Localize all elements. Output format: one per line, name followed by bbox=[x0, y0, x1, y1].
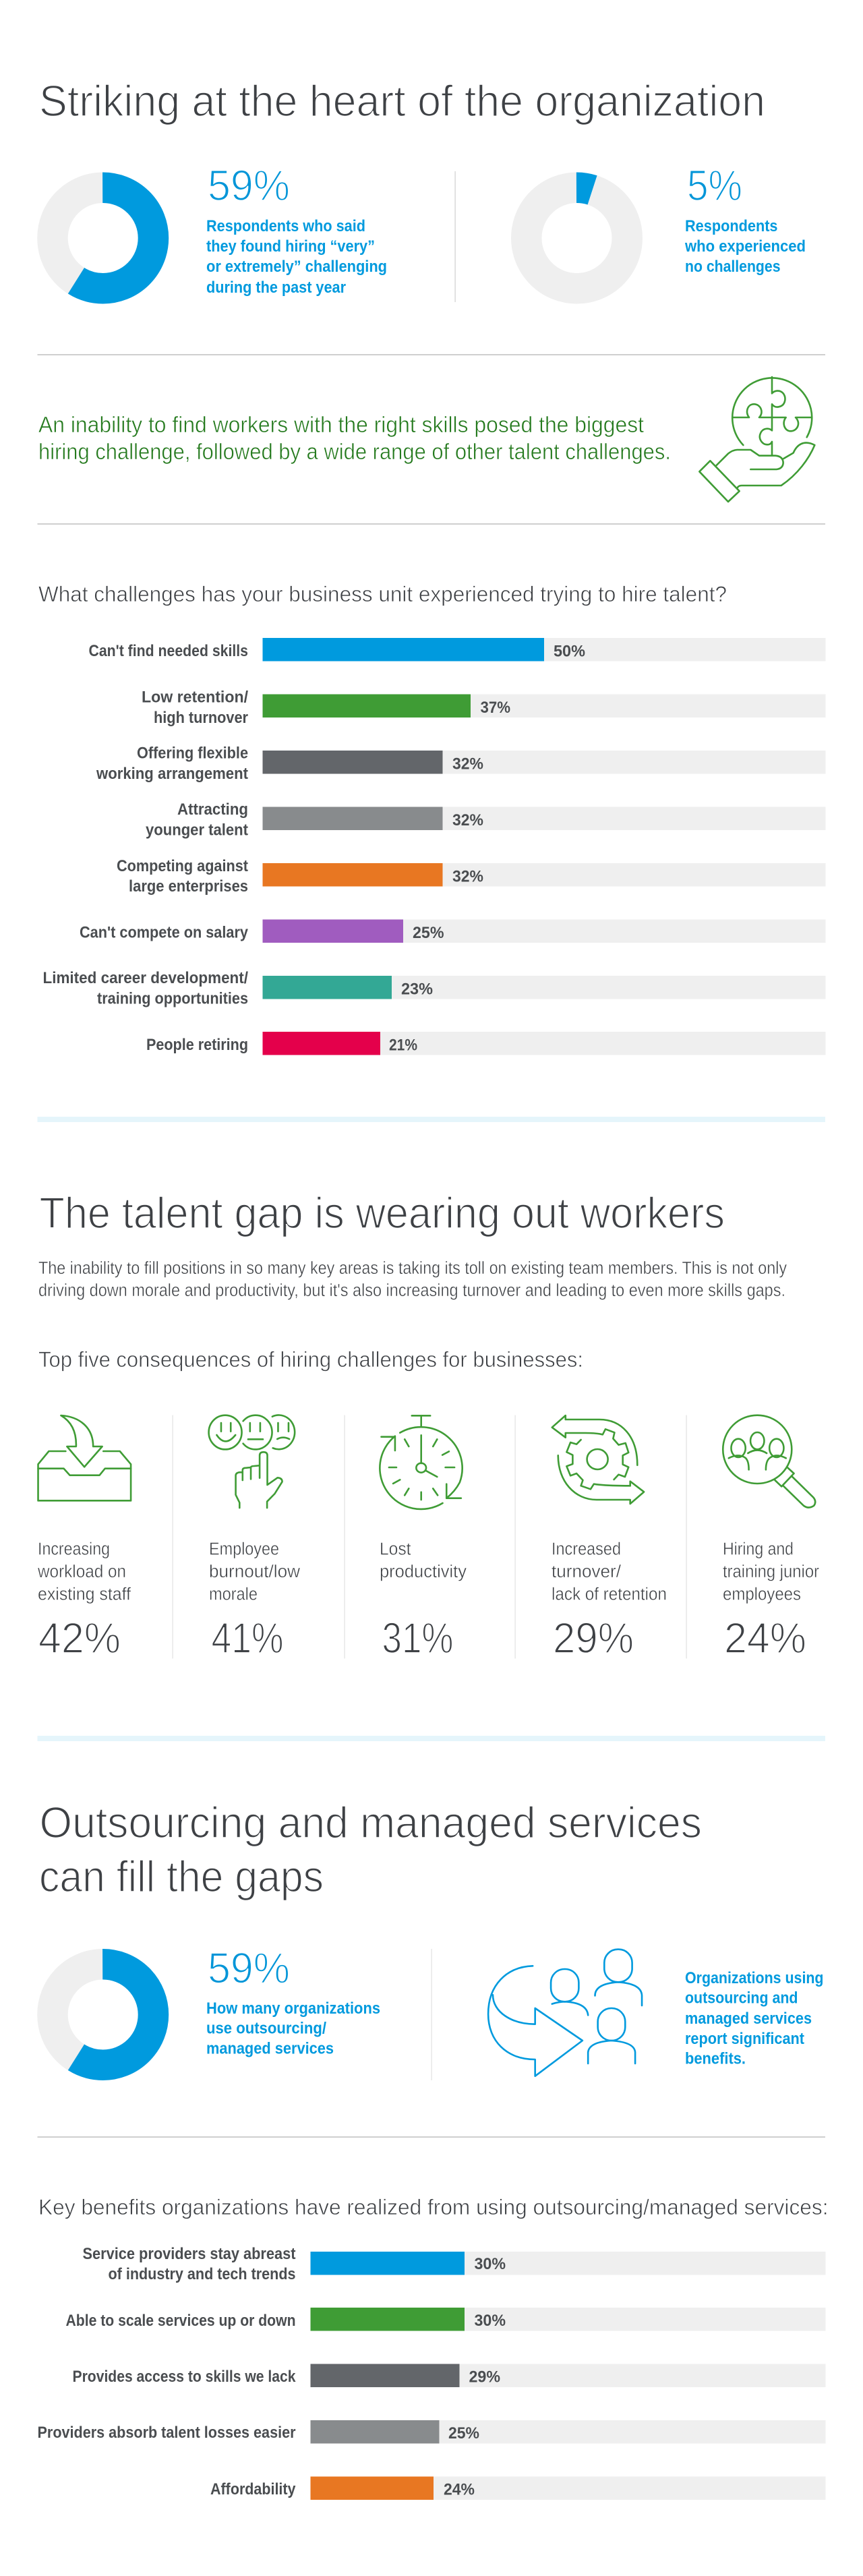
bar: absorb talent losses: Providers absorb talent losses easier bbox=[38, 2424, 295, 2442]
description 59% outsourcing: use outsourcing/ bbox=[206, 2019, 326, 2038]
donut chart 5% bbox=[527, 187, 627, 289]
stat: 41%: 41% bbox=[212, 1614, 283, 1662]
icon: faces and pointing hand bbox=[209, 1415, 295, 1508]
icon: magnifier over people bbox=[723, 1415, 815, 1507]
description: benefits: benefits. bbox=[685, 2050, 746, 2068]
label: increasing workload bbox=[37, 1540, 131, 1604]
label: increased turnover: turnover/ bbox=[552, 1562, 622, 1581]
description 59%: or extremely” challenging bbox=[206, 258, 387, 276]
bar: low retention: 37% bbox=[480, 699, 510, 717]
bar: limited career development: 23% bbox=[401, 980, 433, 998]
column: hiring junior employees 24% bbox=[723, 1415, 819, 1662]
stat: 42%: 42% bbox=[38, 1614, 121, 1662]
bar: attracting younger talent: younger talent bbox=[146, 821, 248, 839]
bar: absorb talent losses: 25% bbox=[448, 2424, 479, 2442]
bar: can't compete on salary bbox=[80, 920, 825, 943]
label: increasing workload: existing staff bbox=[38, 1585, 131, 1604]
bar: competing against large enterprises bbox=[117, 857, 825, 896]
bar: flexible working arrangement: working arrangement bbox=[96, 765, 248, 783]
bar: people retiring bbox=[146, 1032, 825, 1055]
stat: 24%: 24% bbox=[724, 1614, 806, 1662]
label: employee burnout bbox=[209, 1540, 301, 1604]
bar: people retiring: People retiring bbox=[146, 1036, 248, 1054]
heading: challenges question: What challenges has your business unit experienced trying to hire talent? bbox=[38, 582, 727, 606]
bar: scale services: Able to scale services up or down bbox=[66, 2312, 295, 2330]
description: benefits: report significant bbox=[685, 2030, 804, 2048]
label: hiring junior: training junior bbox=[723, 1562, 819, 1581]
bar: flexible working arrangement: Offering flexible bbox=[137, 744, 248, 763]
bar: scale services: 30% bbox=[475, 2312, 506, 2330]
bar: limited career development: Limited career development/ bbox=[43, 969, 248, 987]
bar: low retention: high turnover bbox=[154, 709, 248, 727]
description 59% bbox=[206, 217, 387, 297]
stat 59% outsourcing: 59% bbox=[208, 1943, 290, 1992]
label: increased turnover: lack of retention bbox=[552, 1585, 667, 1604]
bar: access to skills: 29% bbox=[469, 2368, 500, 2386]
bar: competing against large enterprises: large enterprises bbox=[129, 877, 248, 896]
description 59% outsourcing: managed services bbox=[206, 2039, 334, 2058]
description: benefits bbox=[685, 1969, 824, 2068]
description 59%: they found hiring “very” bbox=[206, 237, 375, 256]
description 59% outsourcing: How many organizations bbox=[206, 1999, 380, 2018]
paragraph: talent gap intro: The inability to fill positions in so many key areas is taking its toll on existing team members. This is not only bbox=[38, 1259, 787, 1278]
icon: hand holding puzzle bbox=[699, 377, 814, 502]
bar: attracting younger talent: Attracting bbox=[177, 800, 248, 819]
stat: 29%: 29% bbox=[553, 1614, 634, 1662]
heading: outsourcing and managed services: Outsourcing and managed services bbox=[39, 1798, 702, 1847]
description 59% outsourcing bbox=[206, 1999, 380, 2058]
panel: significant benefits bbox=[488, 1950, 824, 2076]
description: benefits: outsourcing and bbox=[685, 1989, 798, 2007]
bar: attracting younger talent bbox=[146, 800, 825, 839]
bar: stay abreast: of industry and tech trends bbox=[108, 2265, 295, 2283]
label: employee burnout: burnout/low bbox=[209, 1562, 301, 1581]
bar chart: key benefits bbox=[38, 2245, 825, 2500]
callout: inability to find workers bbox=[38, 412, 671, 464]
panel: 59% organizations bbox=[53, 1943, 380, 2065]
bar: affordability bbox=[210, 2476, 825, 2500]
column: increased turnover 29% bbox=[552, 1415, 667, 1662]
bar: affordability: Affordability bbox=[210, 2480, 296, 2498]
label: increased turnover: Increased bbox=[552, 1540, 621, 1559]
donut chart 59% outsourcing bbox=[53, 1964, 153, 2065]
stat: 31%: 31% bbox=[382, 1614, 453, 1662]
description 5%: Respondents bbox=[685, 217, 778, 235]
bar: people retiring: 21% bbox=[389, 1036, 417, 1055]
paragraph: talent gap intro bbox=[38, 1259, 787, 1300]
label: lost productivity bbox=[380, 1540, 467, 1581]
panel: 59% respondents bbox=[53, 161, 387, 297]
label: hiring junior bbox=[723, 1540, 819, 1604]
description: benefits: managed services bbox=[685, 2010, 812, 2028]
description 5%: no challenges bbox=[685, 258, 781, 276]
description 59%: during the past year bbox=[206, 279, 346, 297]
icon: gear with cycle arrows bbox=[552, 1415, 644, 1504]
bar: competing against large enterprises: 32% bbox=[452, 867, 483, 886]
bar: flexible working arrangement bbox=[96, 744, 825, 783]
bar: competing against large enterprises: Competing against bbox=[117, 857, 248, 875]
bar: can't compete on salary: Can't compete on salary bbox=[80, 924, 249, 941]
label: hiring junior: Hiring and bbox=[723, 1540, 794, 1559]
paragraph: talent gap intro: driving down morale and productivity, but it's also increasing turnover and leading to even more skills gaps. bbox=[38, 1281, 785, 1300]
bar: attracting younger talent: 32% bbox=[452, 811, 483, 829]
label: increasing workload: workload on bbox=[37, 1562, 126, 1581]
bar: flexible working arrangement: 32% bbox=[452, 755, 483, 773]
bar: low retention bbox=[142, 688, 825, 727]
donut chart 59% bbox=[53, 187, 153, 289]
heading: outsourcing and managed services bbox=[39, 1798, 702, 1901]
icon: stopwatch bbox=[380, 1415, 463, 1509]
description: benefits: Organizations using bbox=[685, 1969, 824, 1987]
bar: low retention: Low retention/ bbox=[142, 688, 248, 707]
bar: can't find needed skills bbox=[89, 638, 825, 661]
bar: scale services bbox=[66, 2308, 825, 2331]
icon: inbox with arrow bbox=[38, 1415, 131, 1500]
bar: limited career development: training opportunities bbox=[97, 990, 248, 1007]
heading: outsourcing and managed services: can fill the gaps bbox=[39, 1852, 324, 1901]
bar: limited career development bbox=[43, 969, 825, 1007]
stat 59%: 59% bbox=[208, 161, 290, 210]
label: employee burnout: morale bbox=[209, 1585, 258, 1604]
bar: stay abreast: Service providers stay abreast bbox=[82, 2245, 296, 2263]
bar: stay abreast: 30% bbox=[475, 2255, 506, 2273]
column: increasing workload 42% bbox=[37, 1415, 131, 1662]
bar: access to skills bbox=[73, 2364, 825, 2387]
label: hiring junior: employees bbox=[723, 1585, 801, 1604]
label: increasing workload: Increasing bbox=[38, 1540, 110, 1559]
heading: striking at the heart: Striking at the heart of the organization bbox=[39, 76, 765, 125]
heading: talent gap: The talent gap is wearing out workers bbox=[39, 1188, 725, 1237]
label: lost productivity: Lost bbox=[380, 1540, 411, 1559]
label: employee burnout: Employee bbox=[209, 1540, 279, 1559]
label: lost productivity: productivity bbox=[380, 1562, 467, 1581]
bar: can't compete on salary: 25% bbox=[413, 924, 444, 942]
stat 5%: 5% bbox=[687, 161, 742, 210]
bar: can't find needed skills: 50% bbox=[554, 642, 585, 661]
description 5%: who experienced bbox=[684, 237, 806, 256]
bar chart: hiring challenges bbox=[43, 638, 825, 1055]
bar: affordability: 24% bbox=[444, 2480, 475, 2499]
callout: inability to find workers: hiring challenge, followed by a wide range of other talent challenges. bbox=[38, 439, 671, 464]
description 59%: Respondents who said bbox=[206, 217, 365, 235]
bar: can't find needed skills: Can't find needed skills bbox=[89, 642, 248, 660]
description 5% bbox=[684, 217, 806, 276]
bar: access to skills: Provides access to skills we lack bbox=[73, 2368, 296, 2386]
callout: inability to find workers: An inability to find workers with the right skills posed the biggest bbox=[38, 412, 644, 437]
bar: absorb talent losses bbox=[38, 2420, 825, 2444]
heading: top five consequences: Top five consequences of hiring challenges for businesses: bbox=[38, 1347, 583, 1372]
column: lost productivity 31% bbox=[380, 1415, 467, 1662]
heading: key benefits: Key benefits organizations have realized from using outsourcing/managed services: bbox=[38, 2195, 828, 2219]
bar: stay abreast bbox=[82, 2245, 825, 2283]
icon: arrow toward people bbox=[488, 1950, 642, 2076]
column: employee burnout 41% bbox=[209, 1415, 301, 1662]
panel: 5% respondents bbox=[527, 161, 806, 289]
label: increased turnover bbox=[552, 1540, 667, 1604]
